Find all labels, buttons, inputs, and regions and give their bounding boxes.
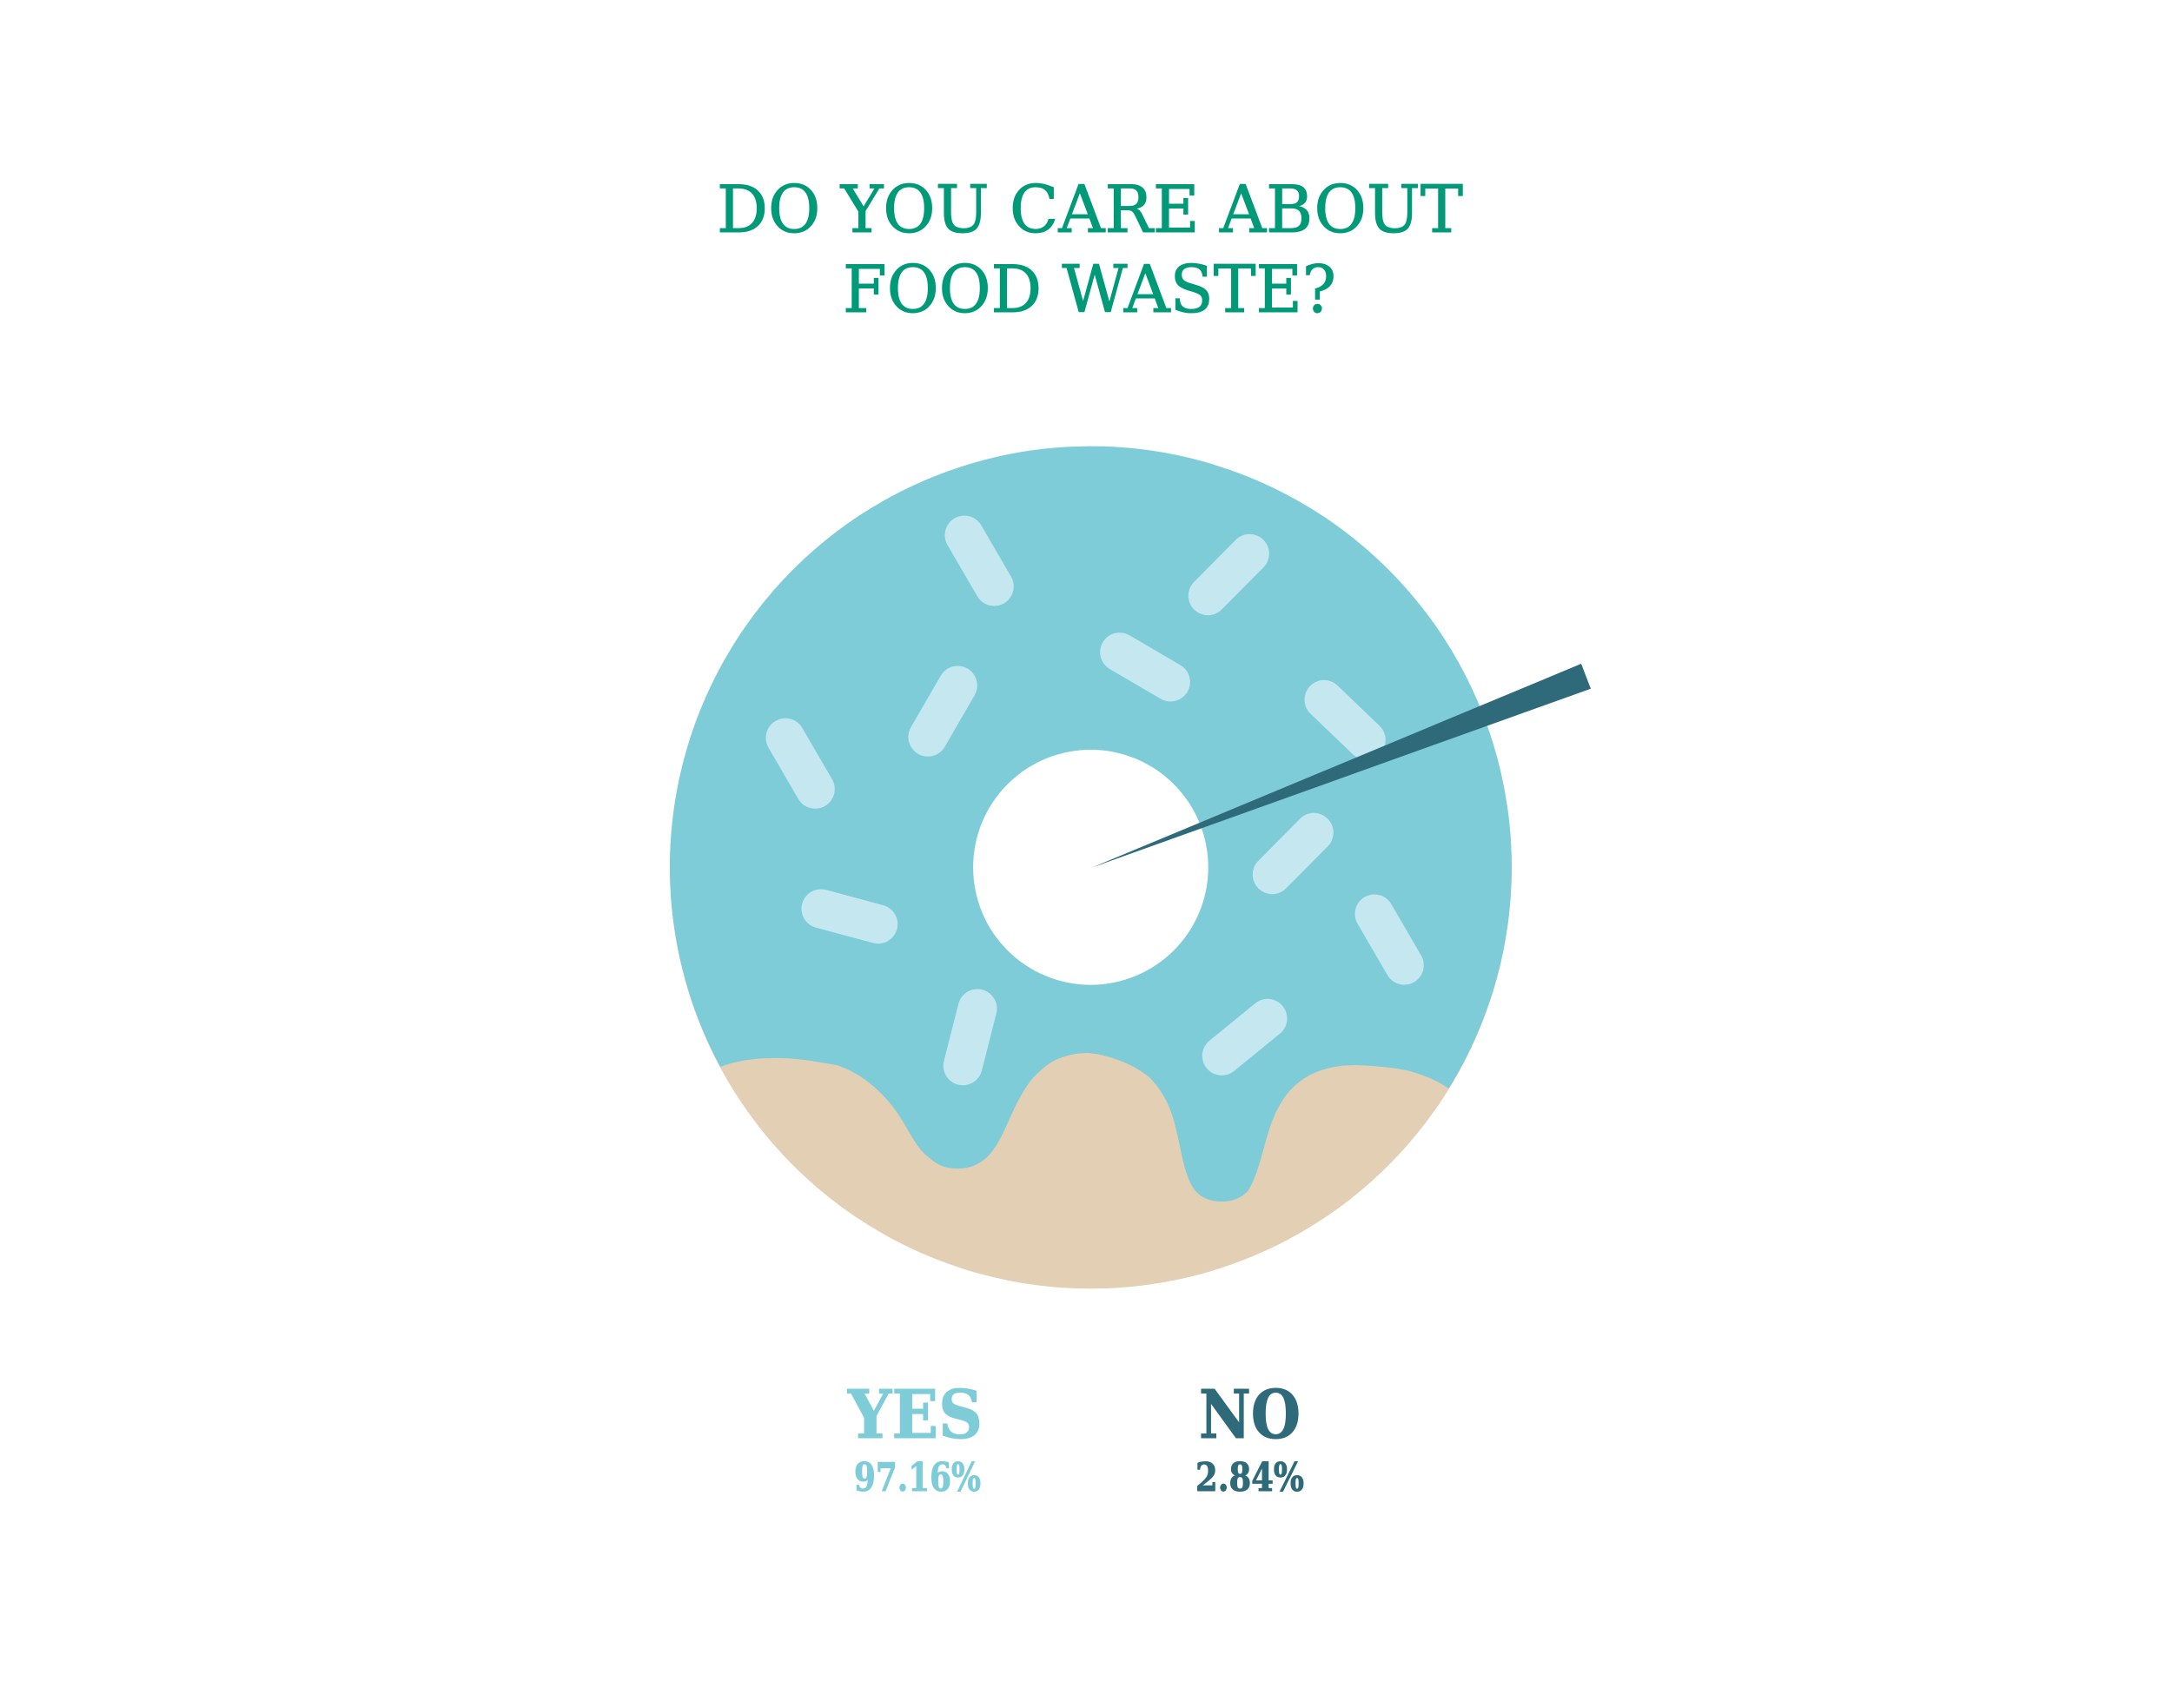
donut icing [670, 447, 1512, 1202]
legend: yes [847, 1376, 983, 1500]
legend: no [1195, 1376, 1304, 1500]
donut chart [670, 447, 1591, 1288]
donut hole [973, 750, 1209, 985]
title [717, 171, 1463, 328]
needle: no slice [1092, 664, 1591, 868]
title: DO YOU CARE ABOUT [717, 171, 1463, 248]
legend: yes: 97.16% [854, 1454, 981, 1500]
legend: no: 2.84% [1195, 1454, 1304, 1500]
sprinkles [785, 535, 1404, 1066]
title: FOOD WASTE? [843, 251, 1336, 328]
legend: no: NO [1199, 1376, 1301, 1454]
donut dough [670, 447, 1512, 1288]
legend: yes: YES [847, 1376, 983, 1454]
